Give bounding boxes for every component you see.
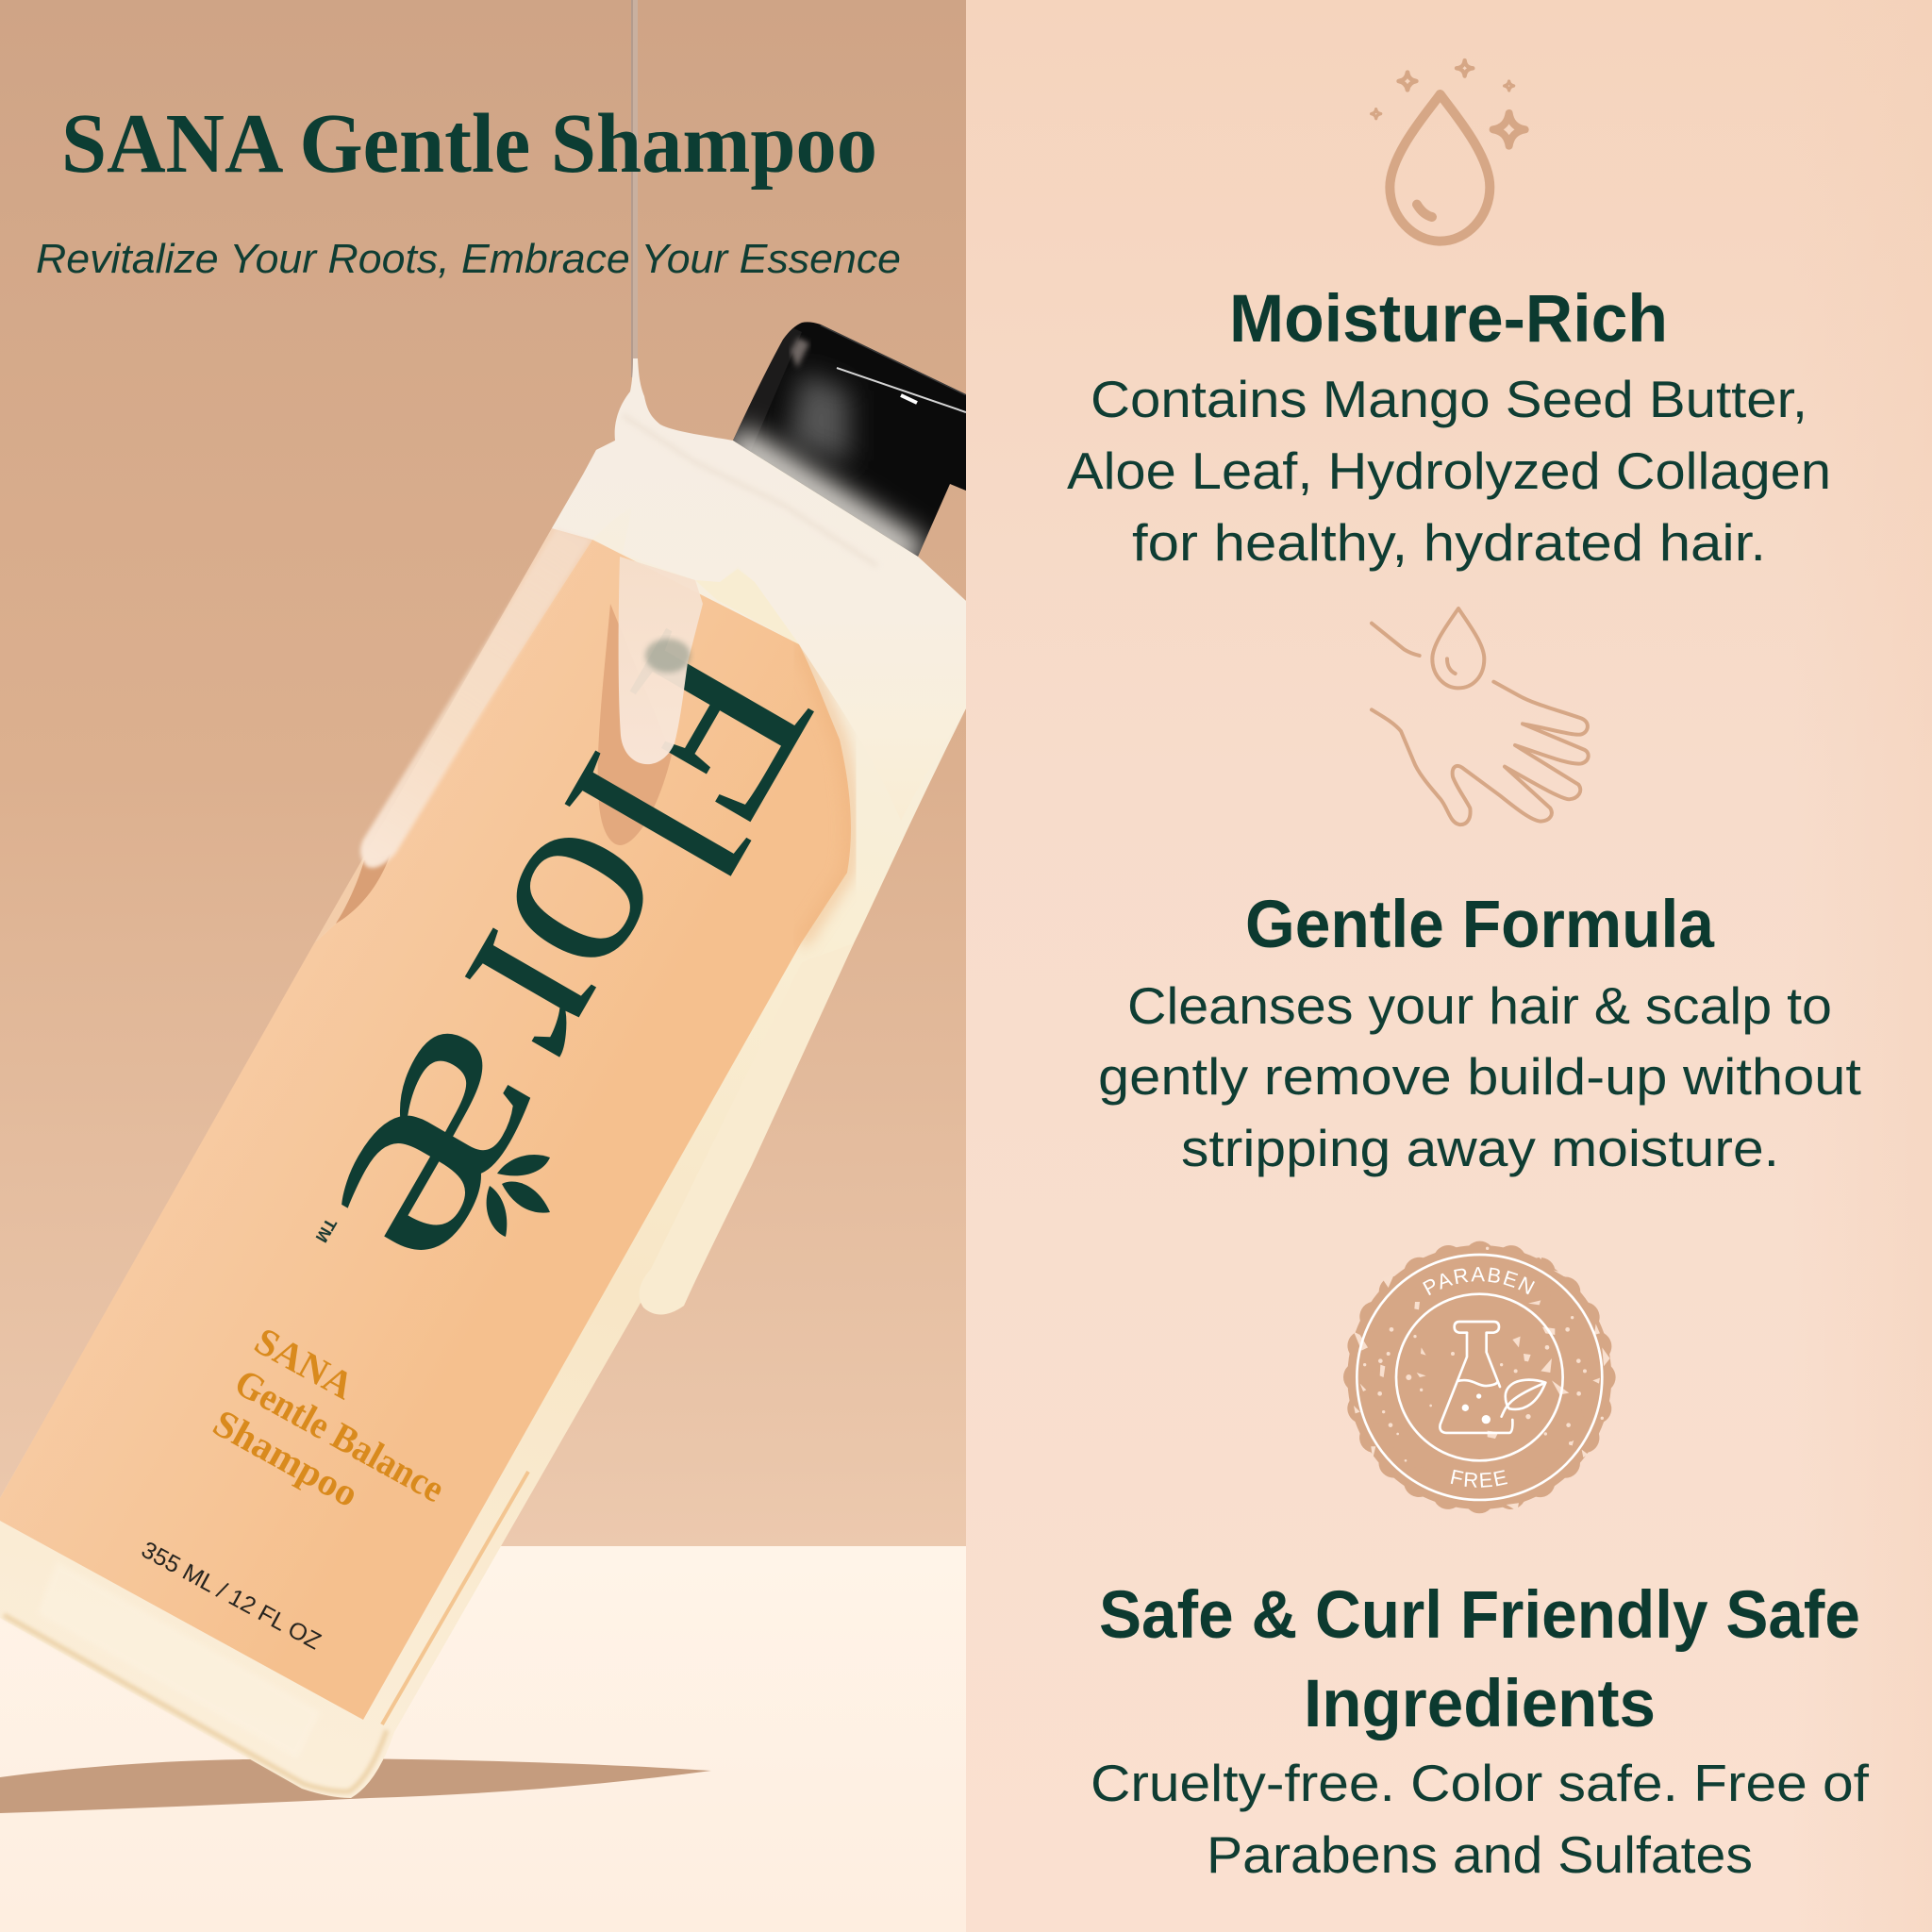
translucent left side [314,528,592,943]
heading: gentle formula: Gentle Formula [1245,888,1714,962]
bottom inner highlight [38,1561,321,1759]
seal speckles [1354,1247,1610,1514]
label edge shading [799,644,851,943]
centre drip shadow [598,604,672,845]
icon: paraben free seal [1343,1241,1616,1513]
text: gentle formula description: stripping away moisture. [1181,1119,1779,1177]
centre drip [619,557,703,764]
volume text: 355 ML / 12 FL OZ [137,1537,325,1655]
top goo [552,358,966,718]
leaf icons [487,1155,550,1237]
title: SANA Gentle Shampoo [61,97,877,191]
bottle body [0,441,966,1798]
product name on label [213,1330,441,1506]
text: gentle formula description: gently remove build-up without [1098,1047,1861,1106]
wall background [0,0,966,1547]
text: gentle formula description [1098,976,1861,1177]
bottle base edge [4,1615,387,1791]
right drip [640,943,854,1315]
text: gentle formula description: Cleanses your hair & scalp to [1127,976,1832,1035]
brand wordmark [341,628,814,1250]
flask icon [1440,1322,1545,1433]
pouring stream [631,0,638,377]
left drip shadow [336,854,391,924]
bottle cast shadow [0,1758,711,1813]
text: moisture-rich description: Aloe Leaf, Hydrolyzed Collagen [1067,441,1831,500]
smudge over wordmark [645,639,691,673]
bottle cap [733,322,966,557]
icon: hand with drop [1372,608,1589,824]
subtitle: Revitalize Your Roots, Embrace Your Essence [36,236,901,282]
heading: safe and curl friendly [1099,1578,1860,1741]
label [0,540,851,1720]
brand wordmark: æ [277,984,643,1332]
text: safe and curl description: Cruelty-free. Color safe. Free of [1091,1754,1870,1812]
panel: product photo [0,0,972,1932]
product name on label: SANA [248,1319,361,1407]
icon: water drop with sparkles [1372,60,1525,242]
product name on label: Gentle Balance [228,1360,452,1510]
heading: safe and curl friendly: Safe & Curl Friendly Safe [1099,1578,1860,1653]
product name on label: Shampoo [207,1401,366,1515]
text: moisture-rich description: Contains Mango Seed Butter, [1091,370,1807,428]
goo pocket [695,569,799,644]
icon: paraben free seal: FREE [1451,1470,1507,1488]
trademark mark: TM [312,1215,341,1246]
panel: benefits [966,0,1932,1932]
brand wordmark: Flor [404,591,870,1113]
heading: safe and curl friendly: Ingredients [1304,1667,1656,1741]
bottle [0,311,972,1798]
heading: moisture-rich: Moisture-Rich [1229,282,1668,357]
flask bubbles [1462,1393,1491,1424]
text: safe and curl description [1091,1754,1870,1884]
left drip [360,528,590,868]
floor surface [0,1546,966,1932]
seal text: PARABEN [1423,1267,1535,1296]
text: moisture-rich description: for healthy, hydrated hair. [1132,513,1766,572]
text: safe and curl description: Parabens and Sulfates [1207,1825,1753,1884]
peach seam line [382,1472,528,1724]
panel background [966,0,1932,1932]
goo crease shadow [628,419,870,561]
text: moisture-rich description [1067,370,1831,572]
